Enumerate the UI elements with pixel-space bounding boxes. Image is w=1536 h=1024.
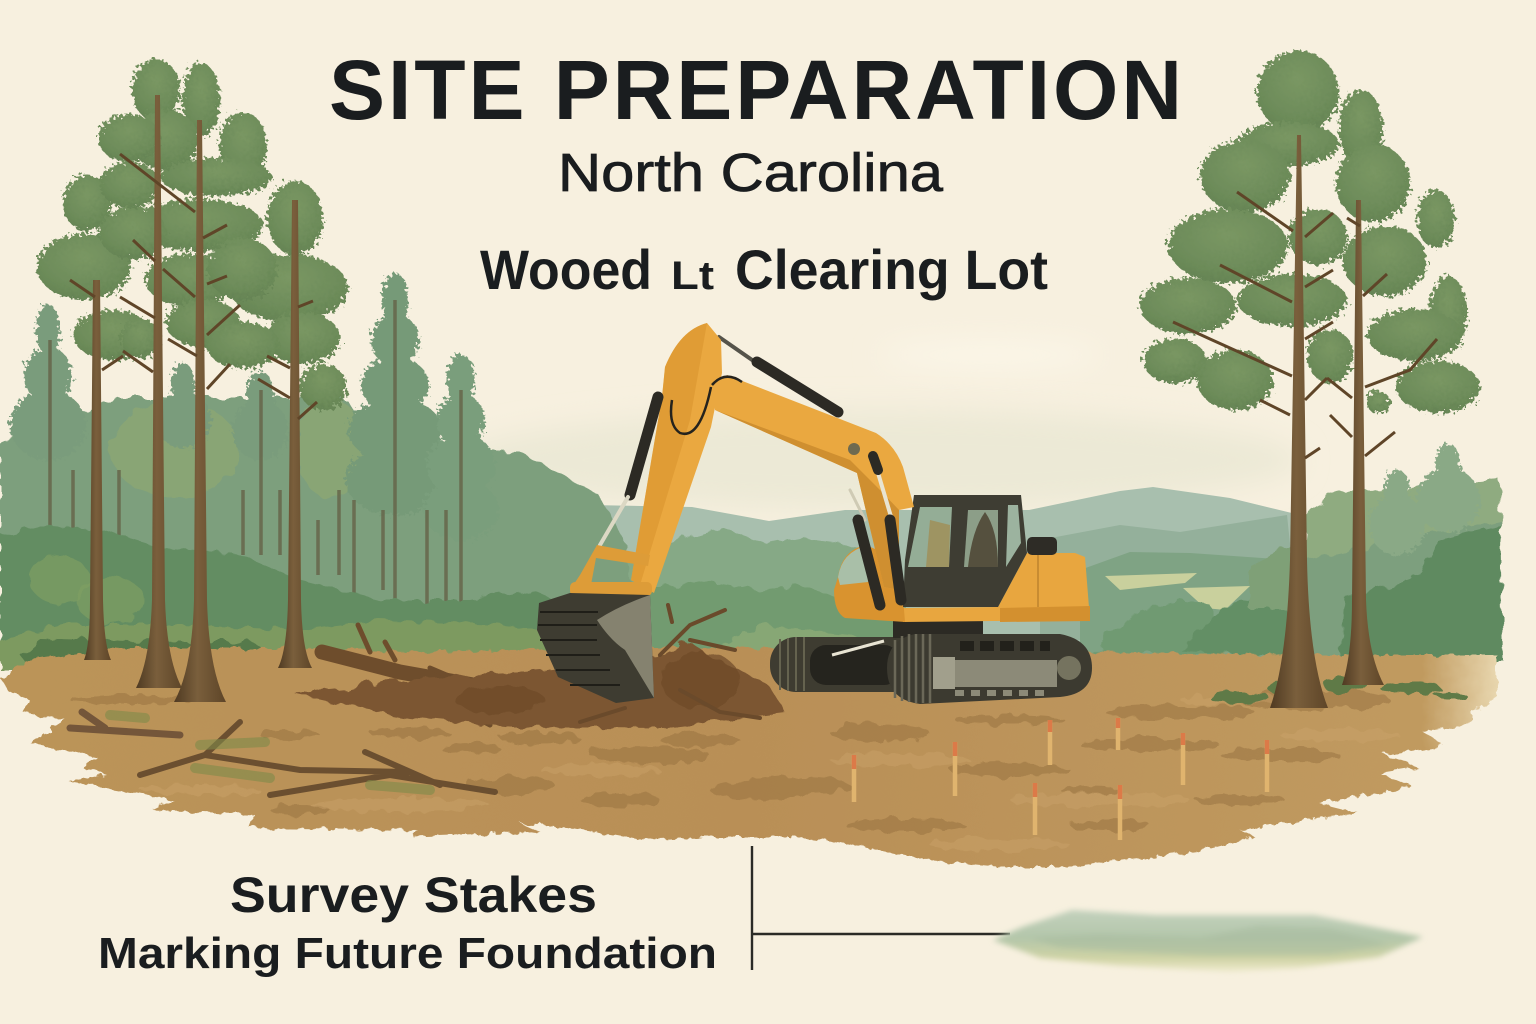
background trunks	[50, 300, 461, 605]
fallen logs and branches	[70, 625, 612, 795]
pine trees right	[1140, 51, 1480, 708]
background conifer: right side	[1369, 443, 1480, 555]
tree E foliage	[1140, 51, 1347, 410]
excavator	[537, 323, 1092, 704]
distant field	[1105, 573, 1250, 610]
subtitle: North Carolina	[558, 143, 944, 203]
left forest background	[0, 273, 640, 670]
tree D trunk	[278, 200, 312, 668]
bucket cylinder	[600, 397, 658, 545]
bucket linkage	[570, 545, 652, 596]
side compartment	[834, 545, 905, 622]
background conifer: far left	[10, 304, 288, 460]
bushes	[0, 525, 640, 670]
heading: garbled wooded lot	[480, 238, 1048, 301]
counterweight housing	[903, 553, 1090, 622]
bucket	[537, 593, 654, 703]
boom lift cylinders	[850, 456, 901, 605]
tree A foliage	[37, 175, 153, 360]
tree A trunk	[84, 280, 111, 660]
distant hills	[590, 487, 1300, 660]
heading: garbled wooded lot: Wooed	[480, 238, 652, 301]
survey stakes	[854, 718, 1267, 840]
rear crawler track	[770, 637, 940, 692]
front crawler track	[887, 634, 1092, 704]
arm cylinder	[719, 337, 838, 412]
tree E trunk	[1270, 135, 1328, 708]
callout leader lines	[752, 846, 1010, 970]
hydraulic hose	[671, 377, 742, 434]
tree B and C foliage	[98, 59, 280, 368]
small landscape vignette	[993, 910, 1423, 972]
roots in dirt pile	[580, 605, 760, 722]
operator cab	[903, 495, 1027, 607]
tree B trunk	[136, 95, 182, 688]
title: SITE PREPARATION	[329, 43, 1182, 137]
background conifer: right	[423, 354, 499, 540]
excavated dirt pile	[296, 640, 786, 728]
stick arm	[631, 323, 722, 593]
tree D foliage	[230, 181, 348, 410]
heading: garbled wooded lot: Clearing Lot	[735, 238, 1048, 301]
shrubs at right tree bases	[1210, 677, 1466, 705]
soil mounds	[70, 690, 1390, 832]
light soil patches	[140, 695, 1400, 852]
right forest background	[1180, 443, 1503, 660]
caption: survey stakes: Survey Stakes	[230, 867, 597, 923]
tree F trunk	[1342, 200, 1384, 685]
tree C trunk	[174, 120, 226, 702]
pine trees left	[37, 59, 348, 702]
side window	[838, 546, 868, 585]
tree F foliage	[1307, 90, 1480, 413]
caption: survey stakes	[98, 867, 717, 978]
sky haze and clouds	[460, 341, 1300, 510]
heading: garbled wooded lot: Lt	[671, 254, 714, 298]
middle tree line	[590, 528, 1230, 660]
bushes right	[1180, 525, 1503, 660]
branches	[1173, 192, 1437, 458]
engine cap	[1027, 537, 1057, 555]
cleared ground	[0, 648, 1497, 867]
slew ring	[893, 620, 983, 638]
branches	[70, 154, 317, 419]
boom pin	[848, 443, 860, 455]
lighter deciduous patches	[110, 402, 240, 498]
background conifer: tall centre	[345, 273, 445, 515]
caption: survey stakes: Marking Future Foundation	[98, 929, 717, 978]
boom	[711, 375, 914, 590]
